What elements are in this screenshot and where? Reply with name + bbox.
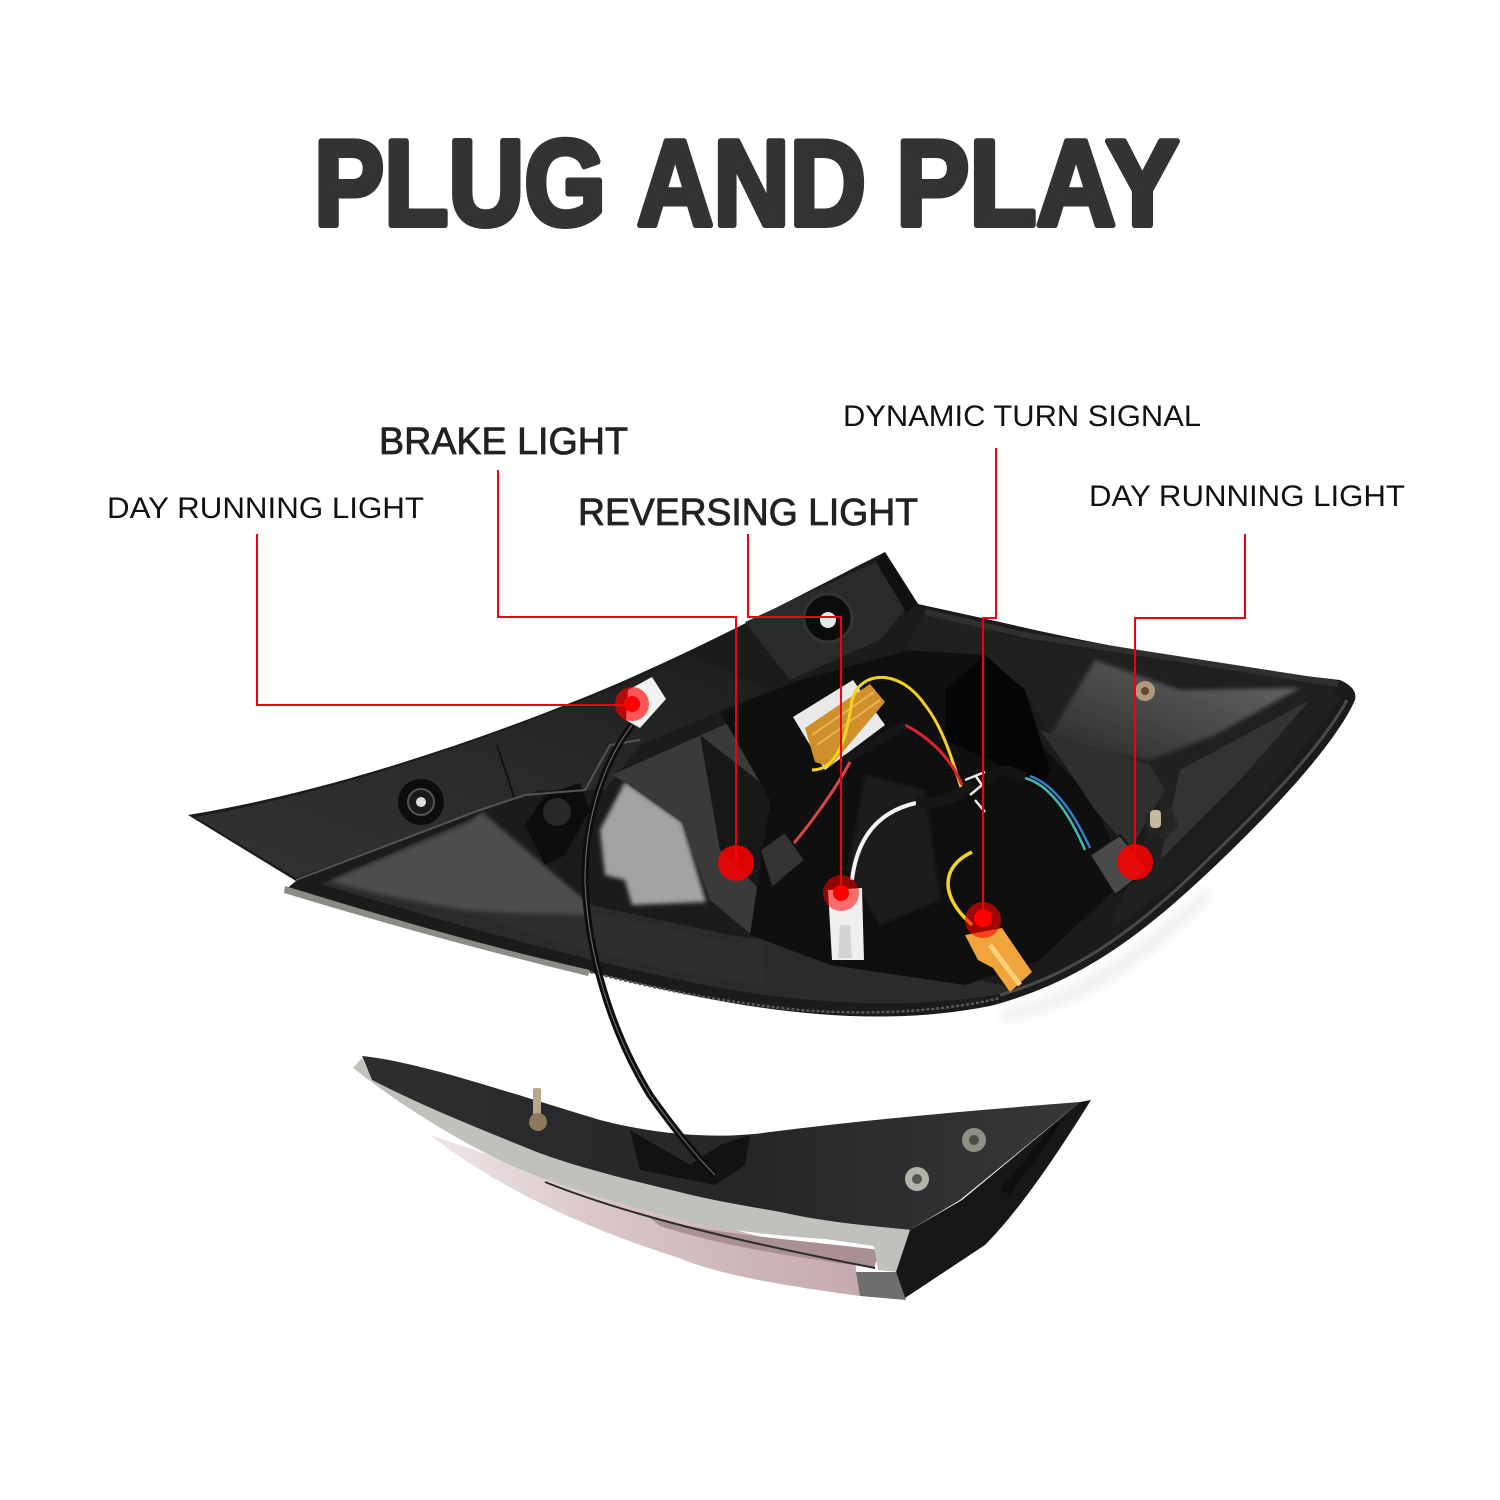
lower tail light lamp: [353, 1056, 1091, 1300]
label: reversing light: REVERSING LIGHT: [578, 492, 918, 534]
title: PLAY: [896, 115, 1179, 251]
grey corner: [856, 1272, 906, 1300]
white wire: [852, 803, 916, 880]
right dark recess panel: [1040, 730, 1165, 850]
top edge rim: [925, 612, 1338, 684]
label: right day running light: DAY RUNNING LIGHT: [1089, 480, 1405, 513]
white connector at flange: [626, 677, 666, 728]
connecting black cable: [585, 725, 715, 1175]
label: left day running light: DAY RUNNING LIGHT: [107, 492, 424, 525]
dark rear body: [362, 1056, 1080, 1230]
gold load resistor: [805, 684, 885, 767]
left threaded bolt: [529, 1088, 547, 1131]
connector: reversing light: [828, 888, 864, 960]
mount screw boss: [804, 594, 852, 642]
raised seam line: [296, 740, 640, 880]
right edge rim lines: [1000, 700, 1347, 995]
dark centre cone: [612, 722, 770, 935]
title: [314, 115, 1179, 251]
rim texture: [590, 972, 1000, 1012]
callout line: reversing light: [748, 534, 859, 911]
flange push nut: [397, 778, 445, 826]
hole slot: [1000, 1122, 1060, 1195]
trim dark edge: [545, 1182, 875, 1268]
callout line: right day running light: [1117, 534, 1245, 880]
top nut: [962, 1128, 986, 1152]
black sleeve upper: [845, 725, 905, 760]
left grey panel: [330, 812, 590, 925]
right grey panel: [1050, 660, 1300, 760]
upper right shell: [905, 612, 1340, 930]
yellow lower wire: [948, 852, 972, 925]
callout line: dynamic turn signal: [965, 448, 1001, 938]
white sticker: [793, 680, 885, 770]
connector: brake light: [760, 832, 805, 888]
dark side gusset: [896, 1100, 1091, 1298]
label: dynamic turn signal: DYNAMIC TURN SIGNAL: [843, 400, 1201, 433]
lens rim strip: [284, 886, 590, 976]
lower right nut: [1145, 805, 1178, 840]
silver trim band: [353, 1058, 910, 1272]
red wire upper: [905, 725, 962, 785]
upper flange panel: [195, 655, 770, 878]
lower dark band: [470, 912, 765, 985]
flange rib: [497, 745, 515, 800]
title: PLUG: [314, 115, 606, 251]
boss beside wire: [525, 783, 590, 865]
dim grey recess: [848, 775, 940, 925]
centre black socket area: [720, 650, 1125, 985]
black sleeve centre: [916, 785, 975, 803]
housing outline: [188, 552, 1355, 1017]
pink lens: [430, 1135, 860, 1296]
dark cone facet right of resistor: [945, 655, 1050, 790]
connector: turn signal amber: [965, 928, 1032, 992]
upper pink strip: [650, 1218, 880, 1268]
light grey centre panel: [600, 782, 706, 905]
dark socket: [630, 1130, 750, 1185]
upper right nut: [1135, 681, 1155, 701]
main tail light housing: [188, 552, 1355, 1022]
soft shadow under housing: [1000, 888, 1212, 1022]
grey tip highlight: [1160, 700, 1310, 860]
bottom floor of housing: [320, 815, 1020, 1003]
black sleeve right: [985, 771, 1025, 782]
green and blue wires: [1025, 776, 1090, 850]
mount tab: [745, 560, 908, 680]
junction wires: [965, 772, 985, 812]
callout line: brake light: [498, 470, 754, 881]
title: AND: [637, 115, 866, 251]
callout line: left day running light: [257, 534, 649, 721]
connector: right day running light: [1090, 835, 1148, 895]
bottom nut: [905, 1167, 929, 1191]
yellow wire: [812, 677, 962, 790]
red wire lower: [788, 762, 850, 850]
label: brake light: BRAKE LIGHT: [379, 421, 628, 463]
